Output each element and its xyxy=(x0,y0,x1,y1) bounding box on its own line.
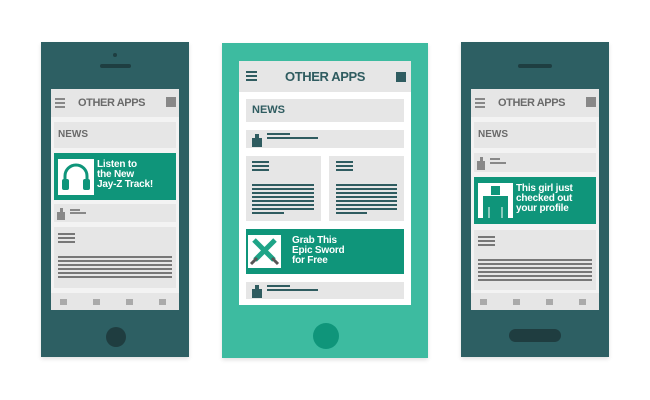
news bar xyxy=(246,99,404,122)
profile row bottom xyxy=(246,282,404,299)
ad: sword xyxy=(246,229,404,274)
news bar: NEWS xyxy=(252,104,285,116)
ad: music: the New xyxy=(97,169,134,180)
ad: music xyxy=(54,153,176,200)
card left xyxy=(246,156,321,221)
ad: sword: Grab This xyxy=(292,235,337,246)
ad: music: Listen to xyxy=(97,159,137,170)
speaker xyxy=(518,64,552,68)
profile row xyxy=(246,130,404,148)
bottom nav xyxy=(471,293,599,310)
header: OTHER APPS xyxy=(285,69,365,84)
header: OTHER APPS xyxy=(498,97,565,109)
phone: right dark xyxy=(461,42,609,357)
profile row xyxy=(474,153,596,172)
ad: profile: checked out xyxy=(516,193,572,204)
speaker xyxy=(100,64,131,68)
ad: music: Jay-Z Track! xyxy=(97,179,153,190)
profile row xyxy=(54,204,176,222)
news bar xyxy=(54,122,176,148)
bottom nav xyxy=(51,293,179,310)
screen xyxy=(239,61,411,305)
home button pill xyxy=(509,329,561,342)
ad: profile xyxy=(474,177,596,224)
news bar xyxy=(474,122,596,148)
camera xyxy=(113,53,117,57)
header xyxy=(239,61,411,92)
ad: profile: your profile xyxy=(516,203,569,214)
card right xyxy=(329,156,404,221)
header xyxy=(471,89,599,117)
phone: left dark xyxy=(41,42,189,357)
home button xyxy=(313,323,339,349)
ad: sword: Epic Sword xyxy=(292,245,344,256)
article xyxy=(54,227,176,288)
news bar: NEWS xyxy=(478,129,508,140)
article xyxy=(474,230,596,290)
header xyxy=(51,89,179,117)
phone: middle teal xyxy=(222,43,428,358)
screen xyxy=(471,89,599,310)
header: OTHER APPS xyxy=(78,97,145,109)
ad: sword: for Free xyxy=(292,255,328,266)
home button xyxy=(106,327,126,347)
news bar: NEWS xyxy=(58,129,88,140)
screen xyxy=(51,89,179,310)
ad: profile: This girl just xyxy=(516,183,573,194)
